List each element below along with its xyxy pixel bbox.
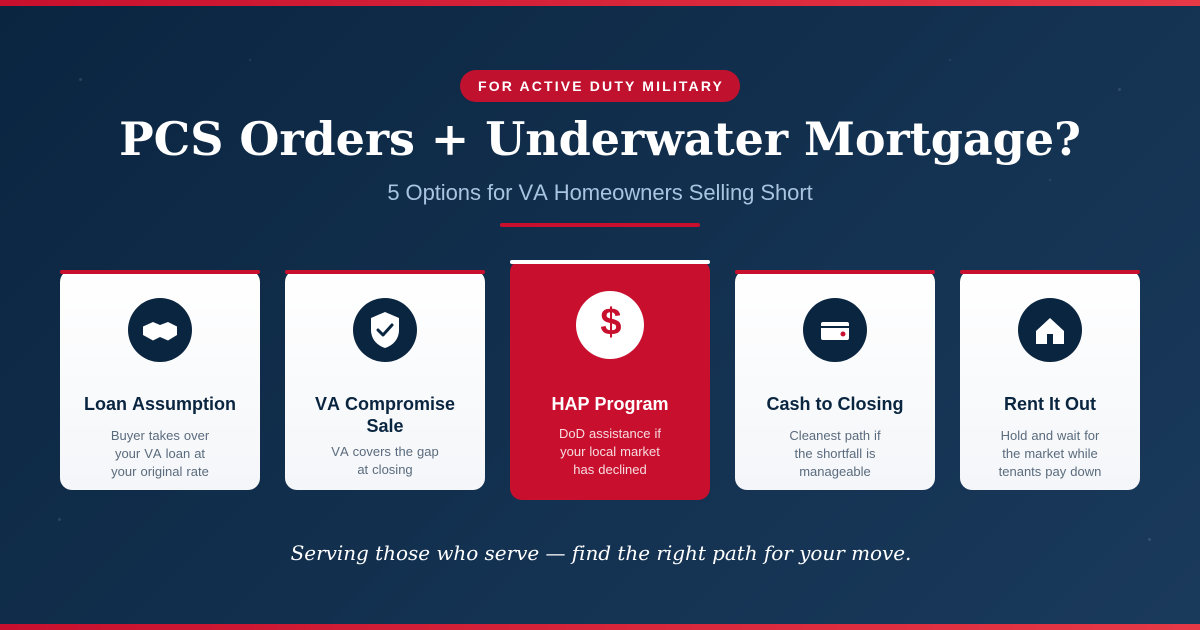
card title: Sale: [366, 416, 404, 436]
card title: [315, 394, 455, 436]
icon: dollar: [576, 291, 644, 359]
card: Cash to Closing: [735, 270, 935, 490]
card description: VA covers the gap: [331, 444, 439, 459]
title: PCS Orders + Underwater Mortgage?: [119, 112, 1081, 166]
card title: Loan Assumption: [84, 394, 236, 414]
card: Rent It Out: [960, 270, 1140, 490]
card description: your original rate: [111, 464, 209, 479]
card description: your VA loan at: [115, 446, 205, 461]
card: Loan Assumption: [60, 270, 260, 490]
icon: payment card: [803, 298, 867, 362]
card description: [559, 426, 661, 477]
card description: the market while: [1002, 446, 1098, 461]
card title: Cash to Closing: [766, 394, 904, 414]
subtitle: 5 Options for VA Homeowners Selling Short: [387, 180, 813, 205]
badge: for active duty military: FOR ACTIVE DUTY MILITARY: [478, 78, 724, 94]
card description: Buyer takes over: [111, 428, 209, 443]
card title: HAP Program: [551, 394, 669, 414]
card description: Cleanest path if: [789, 428, 881, 443]
card description: manageable: [799, 464, 871, 479]
card description: [331, 444, 439, 477]
card description: [789, 428, 881, 479]
icon: house: [1018, 298, 1082, 362]
card description: has declined: [573, 462, 647, 477]
icon: shield with check: [353, 298, 417, 362]
tagline: Serving those who serve — find the right path for your move.: [291, 541, 911, 565]
card description: tenants pay down: [999, 464, 1101, 479]
card description: your local market: [560, 444, 660, 459]
card description: [111, 428, 209, 479]
card description: [998, 428, 1101, 479]
top accent bar: [0, 0, 1200, 6]
card description: Hold and wait for: [1001, 428, 1099, 443]
card description: at closing: [357, 462, 413, 477]
card description: the shortfall is: [794, 446, 876, 461]
title divider: [500, 223, 700, 227]
badge: for active duty military: [460, 70, 740, 102]
icon: dollar: $: [600, 302, 622, 344]
card title: Rent It Out: [1004, 394, 1096, 414]
card title: VA Compromise: [315, 394, 455, 414]
card: HAP Program (highlighted): [510, 260, 710, 500]
card description: DoD assistance if: [559, 426, 661, 441]
icon: handshake: [128, 298, 192, 362]
bottom accent bar: [0, 624, 1200, 630]
card: VA Compromise Sale: [285, 270, 485, 490]
